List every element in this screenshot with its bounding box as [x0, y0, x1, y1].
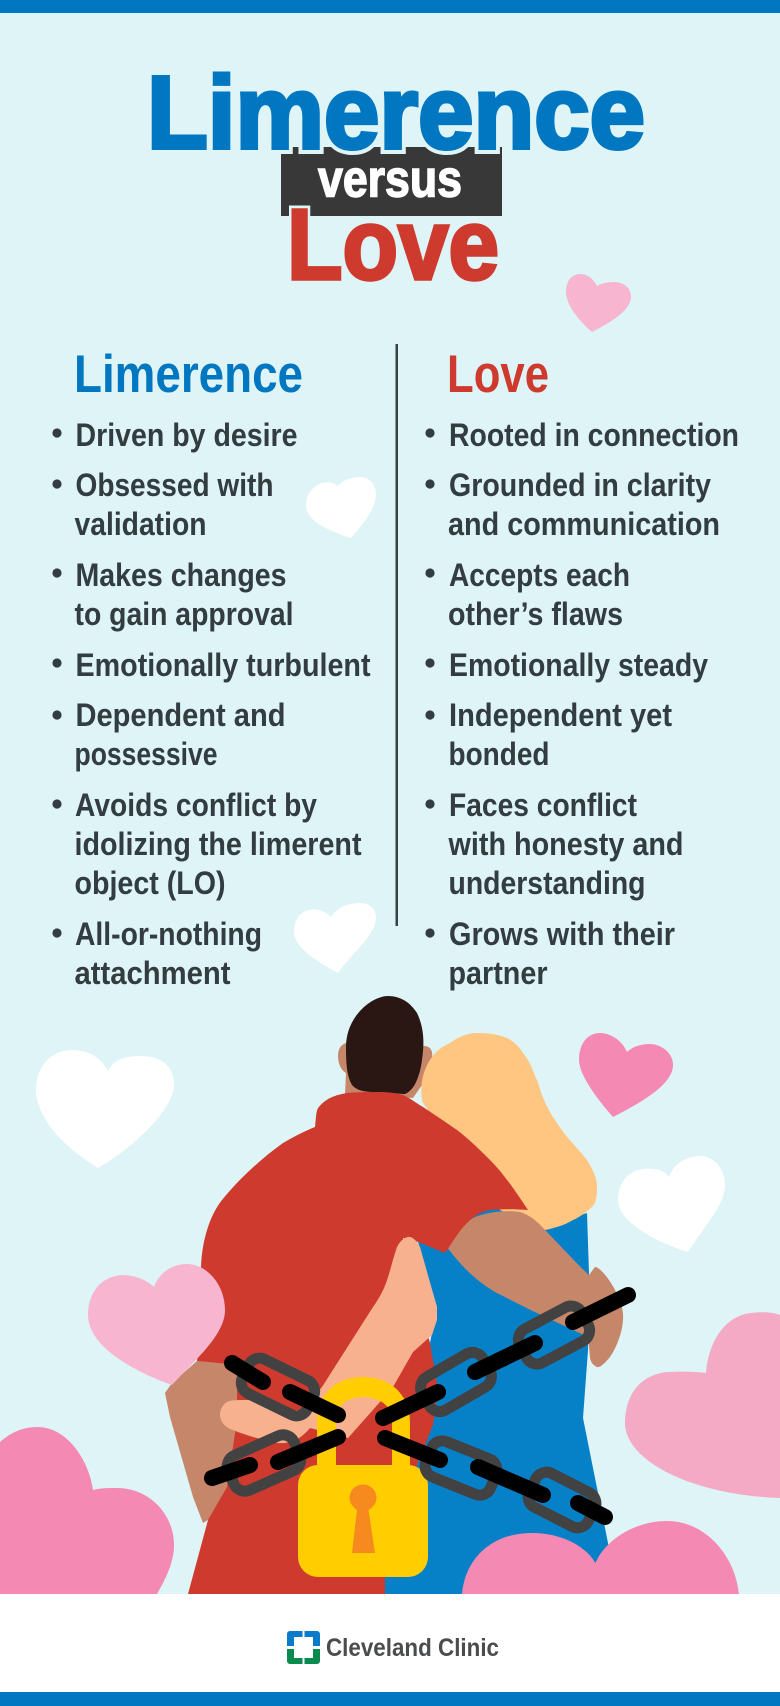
versus box: [281, 147, 502, 216]
top blue bar: [0, 0, 780, 13]
chain bars: [212, 1295, 628, 1517]
title block: [147, 55, 645, 301]
bullet list: love traits: and communication: [448, 506, 720, 542]
title halo: Limerence: Limerence: [147, 55, 645, 170]
keyhole: [350, 1484, 376, 1553]
man's red shirt: [188, 1092, 528, 1594]
woman's blond hair: [421, 1033, 597, 1230]
title: Limerence: Limerence: [147, 55, 645, 170]
man's left arm: [165, 1361, 240, 1523]
bullet list: limerence traits: validation: [74, 506, 206, 542]
title halo: Love: Love: [287, 189, 499, 301]
icon: large pink heart bottom left: [0, 1427, 174, 1594]
heading: Limerence: Limerence: [74, 345, 303, 404]
bullet list: limerence traits: All-or-nothing: [75, 916, 262, 952]
title: Love: Love: [287, 189, 499, 301]
bullet list: limerence traits: idolizing the limerent: [74, 826, 362, 862]
bullet list: love traits: Emotionally steady: [449, 647, 708, 683]
panel: love column: [425, 345, 739, 991]
heading: Love: Love: [447, 345, 549, 404]
icon: white heart right: [618, 1156, 725, 1252]
bullet list: love traits: other’s flaws: [448, 596, 623, 632]
logo mark: [287, 1631, 320, 1664]
footer white band: [0, 1594, 780, 1692]
woman's forearm and hand: [220, 1237, 437, 1443]
bullet list: love traits: bonded: [448, 736, 550, 772]
chain links: [223, 1302, 600, 1532]
man's right arm around the woman: [447, 1211, 623, 1367]
logo wordmark: Cleveland Clinic: [326, 1634, 499, 1662]
bullet list: limerence traits: Dependent and: [76, 697, 286, 733]
man's ears and neck: [338, 1043, 432, 1098]
panel: limerence column: [52, 345, 371, 991]
bullet list: love traits: Faces conflict: [449, 787, 637, 823]
bullet list: limerence traits: Driven by desire: [76, 417, 298, 453]
icon: small pink heart: [566, 274, 631, 332]
icon: pink heart upper right: [579, 1033, 673, 1117]
woman's blue dress: [385, 1200, 612, 1594]
icon: light pink heart left: [88, 1264, 225, 1385]
bullet list: love traits: Independent yet: [449, 697, 672, 733]
bullet list: limerence traits: Obsessed with: [76, 467, 274, 503]
icon: large light pink heart right: [625, 1312, 780, 1498]
bullet list: limerence traits: [52, 417, 371, 991]
versus label: versus: [318, 150, 462, 208]
bullet list: limerence traits: object (LO): [74, 865, 226, 901]
padlock: [298, 1377, 428, 1577]
man's dark hair: [346, 996, 423, 1094]
bullet list: love traits: with honesty and: [448, 826, 684, 862]
logo: Cleveland Clinic: [287, 1631, 499, 1664]
bullet list: love traits: partner: [448, 955, 548, 991]
bullet list: limerence traits: possessive: [74, 736, 218, 772]
bullet list: love traits: understanding: [448, 865, 646, 901]
padlock shackle: [317, 1377, 410, 1470]
icon: white heart middle: [306, 477, 376, 538]
bullet list: limerence traits: Emotionally turbulent: [76, 647, 371, 683]
bullet list: love traits: Grounded in clarity: [449, 467, 711, 503]
icon: white heart lower: [294, 903, 376, 973]
bottom blue bar: [0, 1692, 780, 1706]
bullet list: limerence traits: attachment: [74, 955, 231, 991]
bullet list: limerence traits: Avoids conflict by: [75, 787, 317, 823]
illustration: embracing couple chained by a padlock: [88, 996, 628, 1594]
bullet list: limerence traits: Makes changes: [76, 557, 286, 593]
bullet list: love traits: Rooted in connection: [449, 417, 739, 453]
icon: big white heart left: [36, 1050, 174, 1168]
icon: large pink heart bottom center: [462, 1521, 739, 1594]
bullet list: limerence traits: to gain approval: [74, 596, 294, 632]
padlock body: [298, 1465, 428, 1577]
bullet list: love traits: Accepts each: [449, 557, 630, 593]
bullet list: love traits: Grows with their: [449, 916, 675, 952]
bullet list: love traits: [425, 417, 739, 991]
